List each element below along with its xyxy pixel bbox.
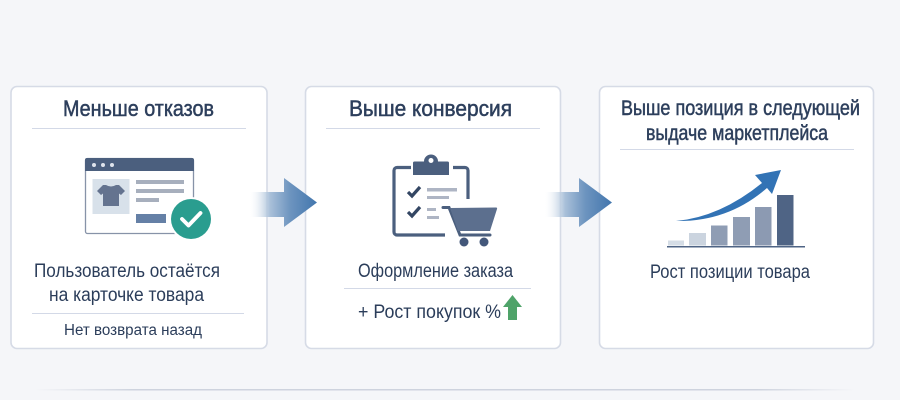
panel: higher marketplace position xyxy=(600,86,874,348)
text: purchases growth: + Рост покупок % xyxy=(358,302,501,323)
arrow: step one to step two xyxy=(250,178,317,227)
chart: growing bars with arrow xyxy=(667,170,805,248)
panel: fewer bounces xyxy=(11,86,267,348)
panel: higher conversion xyxy=(306,86,560,348)
heading: higher conversion: Выше конверсия xyxy=(349,96,512,121)
icon: checklist clipboard with cart xyxy=(394,155,497,246)
heading: higher position in next marketplace results xyxy=(621,97,860,145)
arrow: step two to step three xyxy=(545,178,612,227)
heading: fewer bounces: Меньше отказов xyxy=(63,96,214,121)
text: user stays on product card: на карточке товара xyxy=(49,285,204,306)
icon: green up arrow xyxy=(503,295,522,320)
heading: higher position in next marketplace results: Выше позиция в следующей xyxy=(621,97,860,120)
text: user stays on product card xyxy=(34,261,220,306)
text: user stays on product card: Пользователь остаётся xyxy=(34,261,220,282)
icon: product page with check xyxy=(85,158,213,241)
heading: higher position in next marketplace results: выдаче маркетплейса xyxy=(646,122,828,145)
text: checkout: Оформление заказа xyxy=(358,261,513,282)
text: product position growth: Рост позиции товара xyxy=(650,262,810,283)
arrow: rising curve xyxy=(676,170,781,221)
text: no going back: Нет возврата назад xyxy=(64,322,202,339)
